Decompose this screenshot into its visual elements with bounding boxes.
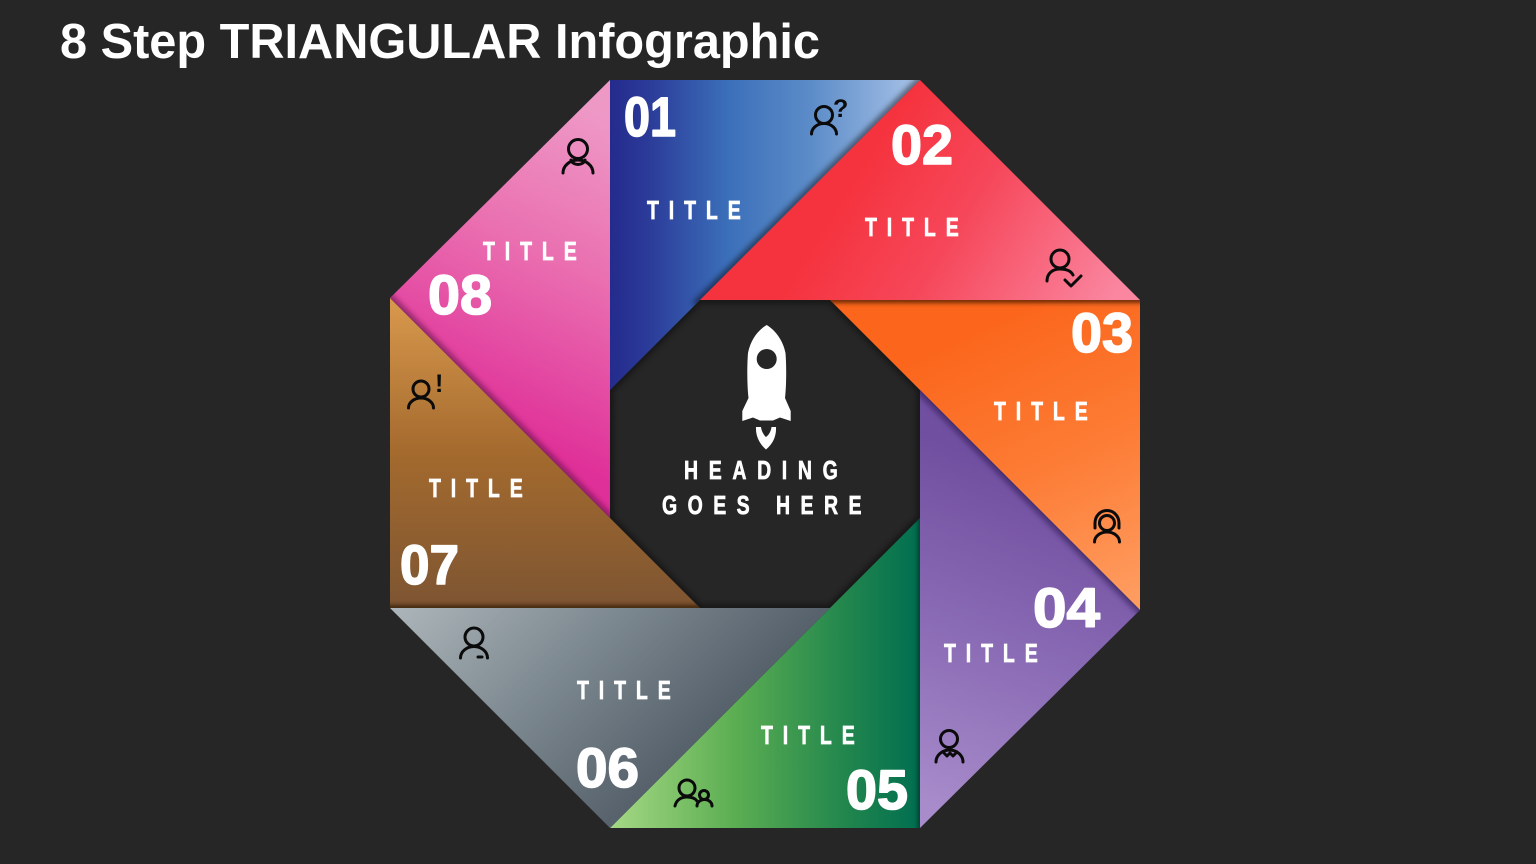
label: title 02: TITLE [865, 212, 959, 242]
icon: person alert [408, 370, 443, 408]
panel: step 02 [700, 80, 1140, 300]
panel: step 04 [915, 385, 1145, 828]
panel: step 01 [610, 75, 925, 390]
panel: step 03 [825, 296, 1145, 610]
heading text [662, 455, 862, 520]
panel: step 06 [390, 608, 830, 828]
number 02: 02 [891, 113, 953, 176]
icon: rocket [742, 325, 791, 450]
icon: person collar [936, 730, 963, 762]
icon: person check [1047, 250, 1081, 286]
label: title 04: TITLE [944, 638, 1038, 668]
label: title 03: TITLE [994, 396, 1088, 426]
number 05: 05 [846, 758, 908, 821]
label: title 01: TITLE [647, 195, 741, 225]
number 04: 04 [1033, 576, 1100, 639]
number 07: 07 [400, 533, 459, 596]
icon: person alert: ! [435, 370, 443, 398]
panel: step 07 [385, 298, 705, 611]
label: title 07: TITLE [429, 473, 523, 503]
panel: step 08 [385, 80, 615, 523]
number 08: 08 [428, 263, 492, 326]
label: title 06: TITLE [577, 675, 671, 705]
label: title 05: TITLE [761, 720, 855, 750]
icon: person question [812, 95, 848, 134]
icon: person headset [1094, 510, 1120, 542]
number 06: 06 [576, 736, 639, 799]
panel: center hub [610, 300, 920, 608]
icon: two people [675, 780, 712, 806]
number 01: 01 [624, 85, 676, 148]
panel: step 05 [610, 515, 922, 832]
heading text: HEADING [684, 455, 838, 485]
icon: person [563, 140, 593, 173]
icon: person minus [460, 628, 488, 658]
number 03: 03 [1071, 301, 1133, 364]
heading text: GOES HERE [662, 490, 862, 520]
icon: person question: ? [833, 95, 848, 123]
label: title 08: TITLE [483, 236, 577, 266]
title: 8 Step TRIANGULAR Infographic [60, 15, 820, 69]
